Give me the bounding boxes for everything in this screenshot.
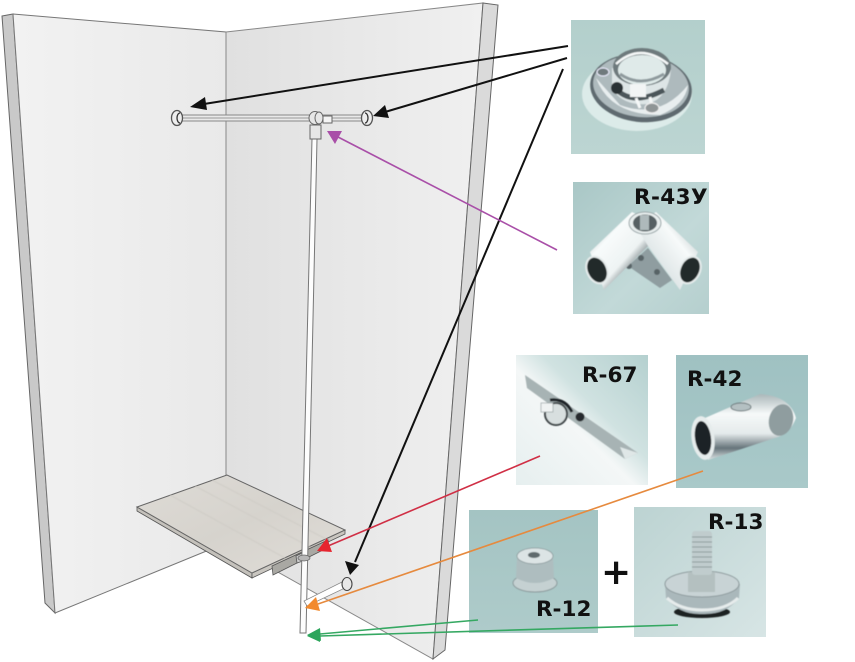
horizontal top tube <box>178 115 366 121</box>
arrow: green from R-12 to tube foot <box>307 620 478 641</box>
label: R-43У: R-43У <box>634 185 708 210</box>
vertical tube <box>298 139 317 633</box>
arrow: black to right flange <box>373 58 567 118</box>
arrow: orange to tube <box>305 471 703 611</box>
wall flange right <box>362 110 372 126</box>
arrow: green from R-13 to tube foot <box>307 625 678 642</box>
label: R-42: R-42 <box>687 367 742 392</box>
label: R-12: R-12 <box>536 597 591 622</box>
arrow: purple to corner connector <box>327 131 557 250</box>
label: R-67: R-67 <box>582 363 637 388</box>
corner connector <box>309 112 332 139</box>
panel: flange photo <box>571 20 705 154</box>
arrow: black to left flange <box>190 46 568 110</box>
label: R-13: R-13 <box>708 510 763 535</box>
right wall <box>226 3 498 659</box>
shelf bracket rail <box>272 540 329 575</box>
arrow: black to lower flange <box>345 69 563 575</box>
arrow: red to shelf bracket <box>317 456 540 552</box>
panel: R-67 clamp photo <box>516 355 648 485</box>
panel: R-12 nut photo <box>469 510 598 633</box>
shelf <box>137 475 345 578</box>
wall flange left <box>172 110 182 126</box>
lower wall flange and tube <box>304 578 352 606</box>
left wall <box>2 14 226 613</box>
panel: R-42 connector photo <box>676 355 808 488</box>
panel: R-43У elbow photo <box>573 182 709 314</box>
plus sign: + <box>601 552 631 593</box>
panel: R-13 foot photo <box>634 507 766 637</box>
